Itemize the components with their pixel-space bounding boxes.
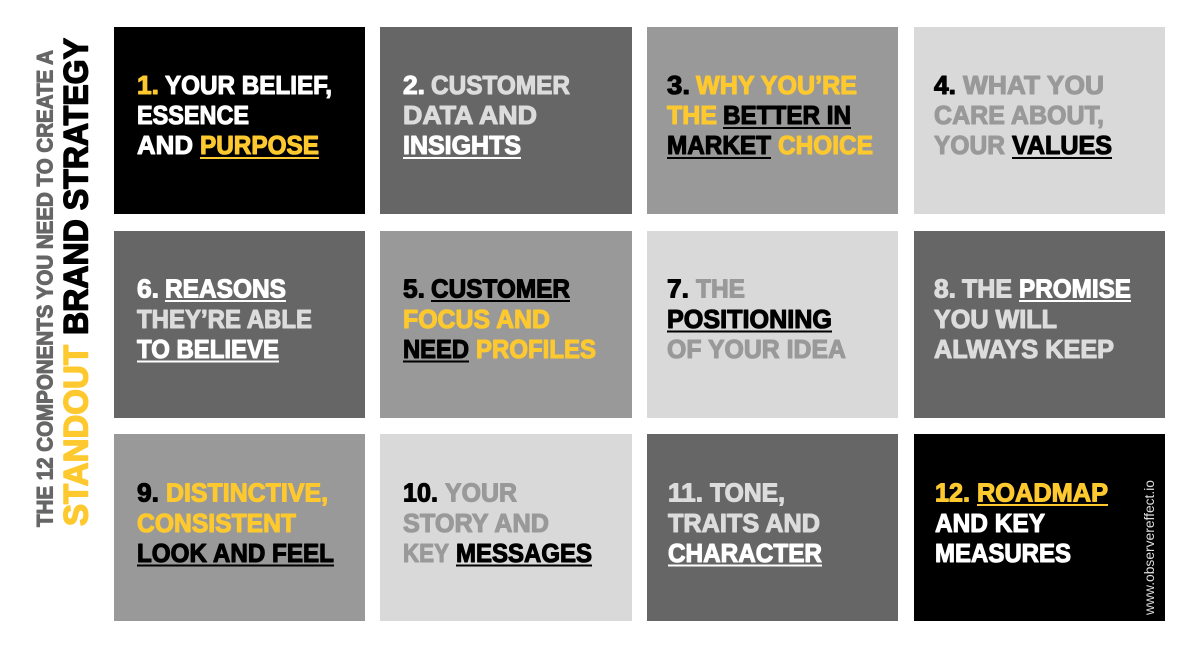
panel: 8 the promise you will always keep: THE [962,276,1012,304]
side title line 2: BRAND STRATEGY [58,38,96,335]
panel: 9 distinctive, consistent look and feel [114,434,365,621]
panel: 5 customer focus and need profiles: 5. [403,276,425,304]
side title line 2: STANDOUT [58,345,96,526]
panel: 5 customer focus and need profiles: CUSTOMER [431,276,570,304]
panel: 12 roadmap and key measures: MEASURES [935,540,1071,568]
panel: 4 what you care about, your values: CARE ABOUT, [934,102,1104,130]
panel: 7 the positioning of your idea: OF YOUR IDEA [667,336,846,364]
panel: 9 distinctive, consistent look and feel: 9. [137,480,159,508]
panel: 6 reasons they're able to believe: 6. [137,276,159,304]
panel: 3 why you're the better in market choice: CHOICE [778,132,873,160]
panel: 4 what you care about, your values [914,27,1165,214]
panel: 9 distinctive, consistent look and feel: DISTINCTIVE, [166,480,328,508]
panel: 2 customer data and insights [380,27,632,214]
panel: 9 distinctive, consistent look and feel: LOOK AND FEEL [137,540,334,568]
panel: 2 customer data and insights: DATA AND [403,102,537,130]
panel: 4 what you care about, your values: VALUES [1012,132,1112,160]
panel: 2 customer data and insights: INSIGHTS [403,132,521,160]
panel: 8 the promise you will always keep: YOU WILL [934,306,1057,334]
panel: 6 reasons they're able to believe: REASONS [165,276,286,304]
panel: 3 why you're the better in market choice: 3. [667,72,690,100]
side title line 2 [58,38,96,526]
panel: 12 roadmap and key measures: AND KEY [935,510,1045,538]
panel: 1 belief, essence and purpose [114,27,365,214]
side title line 1: THE 12 COMPONENTS YOU NEED TO CREATE A [32,50,58,527]
panel: 11 tone, traits and character: 11. [668,480,703,508]
panel: 10 your story and key messages: 10. [403,480,438,508]
panel: 8 the promise you will always keep: ALWAYS KEEP [934,336,1114,364]
panel: 9 distinctive, consistent look and feel: CONSISTENT [137,510,296,538]
panel: 11 tone, traits and character: CHARACTER [668,540,822,568]
panel: 8 the promise you will always keep: 8. [934,276,956,304]
panel: 4 what you care about, your values: 4. [934,72,956,100]
panel: 5 customer focus and need profiles: PROFILES [476,336,596,364]
panel: 1 belief, essence and purpose: AND [137,132,193,160]
panel: 12 roadmap and key measures: 12. [935,480,970,508]
panel: 8 the promise you will always keep [914,231,1165,418]
panel: 4 what you care about, your values: YOUR [934,132,1005,160]
panel: 7 the positioning of your idea [647,231,898,418]
panel: 7 the positioning of your idea: THE [696,276,745,304]
panel: 1 belief, essence and purpose: 1. [137,72,159,100]
panel: 11 tone, traits and character: TRAITS AND [668,510,820,538]
panel: 3 why you're the better in market choice [647,27,898,214]
side title [32,38,96,527]
panel: 1 belief, essence and purpose: PURPOSE [200,132,319,160]
panel: 10 your story and key messages [380,434,632,621]
panel: 3 why you're the better in market choice: THE [667,102,717,130]
panel: 12 roadmap and key measures: ROADMAP [977,480,1108,508]
panel: 5 customer focus and need profiles: FOCUS AND [403,306,550,334]
panel: 10 your story and key messages: MESSAGES [456,540,592,568]
panel: 6 reasons they're able to believe: THEY’RE ABLE [137,306,312,334]
panel: 5 customer focus and need profiles: NEED [403,336,469,364]
panel: 3 why you're the better in market choice: MARKET [667,132,771,160]
panel: 1 belief, essence and purpose: YOUR BELIEF, [165,72,332,100]
panel: 5 customer focus and need profiles [380,231,632,418]
panel: 3 why you're the better in market choice: BETTER IN [723,102,851,130]
panel: 7 the positioning of your idea: 7. [667,276,689,304]
panel: 6 reasons they're able to believe: TO BELIEVE [137,336,279,364]
panel: 4 what you care about, your values: WHAT YOU [963,72,1104,100]
panel: 8 the promise you will always keep: PROMISE [1019,276,1131,304]
panel: 7 the positioning of your idea: POSITIONING [667,306,832,334]
panel: 10 your story and key messages: STORY AND [403,510,549,538]
panel: 6 reasons they're able to believe [114,231,365,418]
panel: 11 tone, traits and character [647,434,898,621]
panel: 2 customer data and insights: CUSTOMER [431,72,570,100]
panel: 1 belief, essence and purpose: ESSENCE [137,102,249,130]
website credit: www.observereffect.io [1142,480,1157,616]
panel: 11 tone, traits and character: TONE, [710,480,785,508]
panel: 3 why you're the better in market choice: WHY YOU’RE [696,72,857,100]
panel: 2 customer data and insights: 2. [403,72,425,100]
panel: 10 your story and key messages: YOUR [445,480,517,508]
panel: 12 roadmap and key measures [914,434,1165,621]
panel: 10 your story and key messages: KEY [403,540,449,568]
